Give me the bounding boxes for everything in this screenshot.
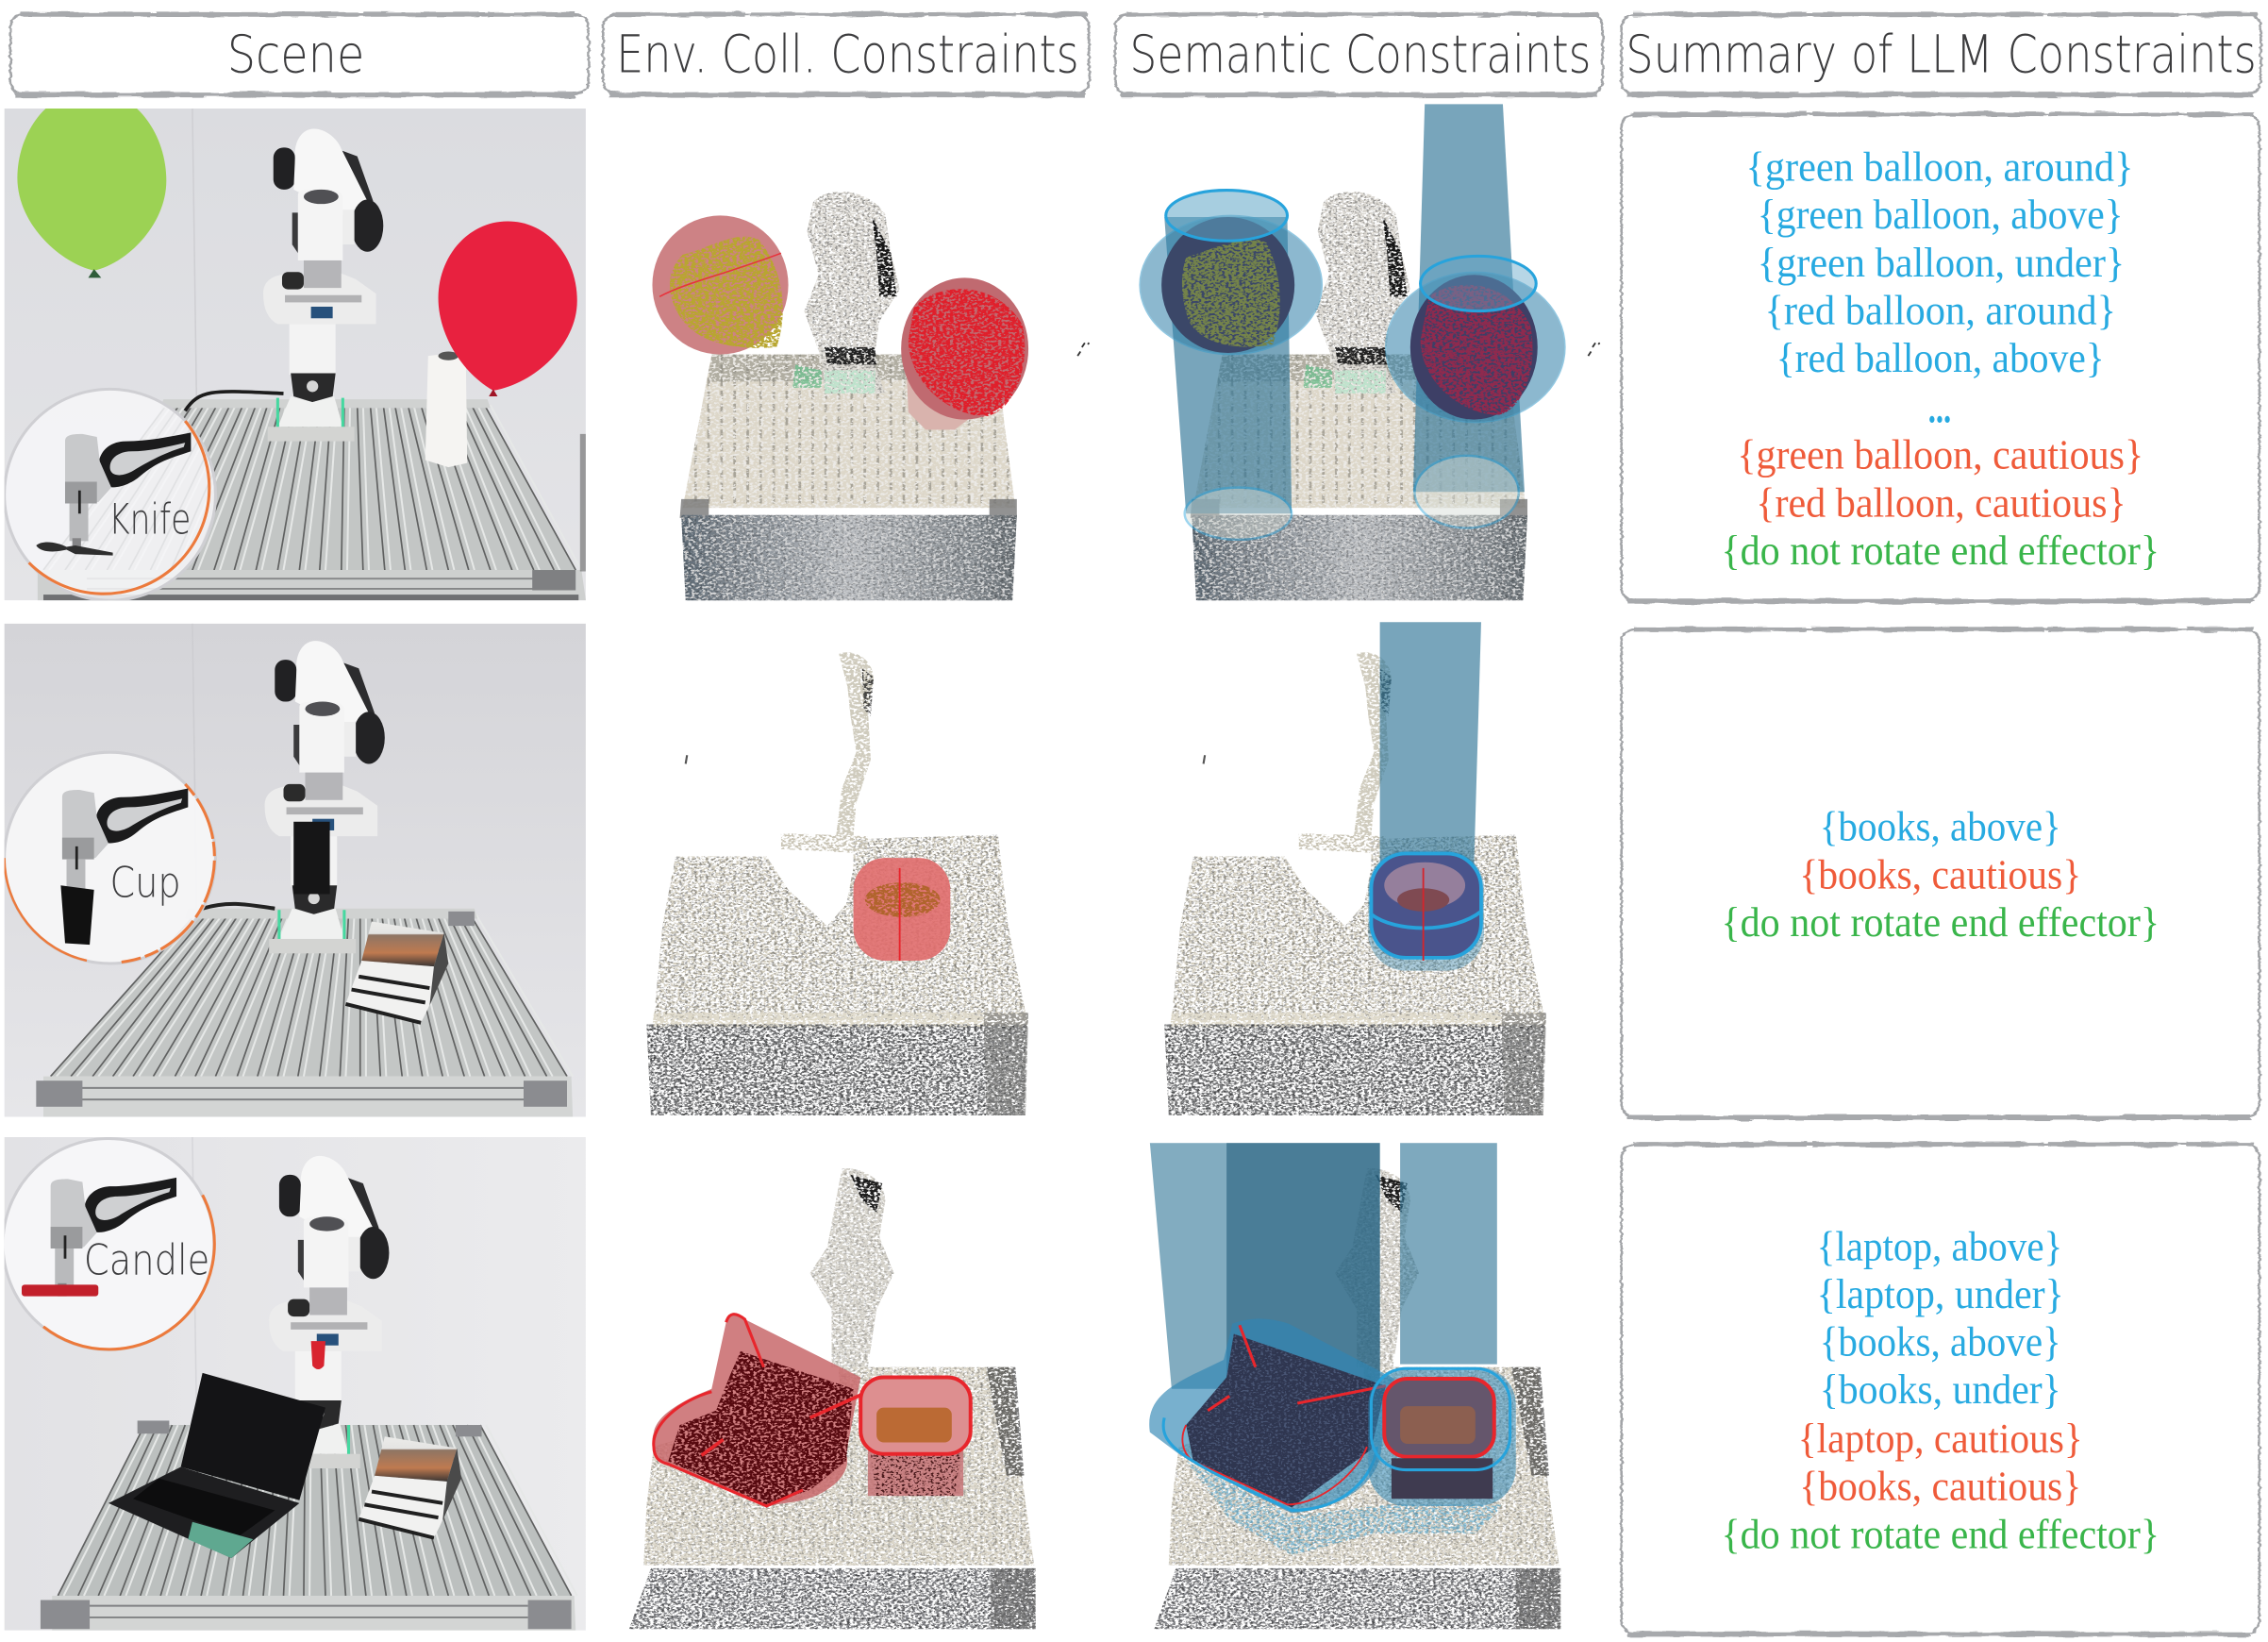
sphere: red balloon [1386,256,1565,423]
sphere: green balloon [1140,191,1322,355]
panel: summary row 2: {books, above} [1820,803,2061,850]
label: Knife: Knife [108,496,191,545]
heading: Semantic Constraints: Semantic Constraints [1129,25,1591,86]
panel: summary row 1: {do not rotate end effector} [1721,527,2160,574]
panel: summary row 3: {books, under} [1820,1366,2061,1413]
icon: books [345,922,448,1023]
collision sphere: red balloon [901,277,1028,420]
collision box: books [854,858,950,961]
icon: robot arm [263,128,383,442]
heading: Scene: Scene [227,25,364,86]
panel: summary row 1: ... [1928,385,1951,432]
panel: summary row 1: {green balloon, around} [1746,143,2133,191]
inset: knife gripper [5,389,215,600]
panel: summary row 2: {do not rotate end effector} [1721,898,2160,946]
constraint volume: laptop [1149,1318,1394,1514]
heading: Env. Coll. Constraints [603,14,1089,94]
icon: candle [22,1284,98,1297]
icon: books [359,1436,461,1538]
collision volume: laptop [652,1315,868,1506]
heading: Scene [10,14,589,94]
constraint volume: books [1368,850,1484,971]
panel: env collision row 2 [646,652,1028,1115]
panel: summary row 1: {red balloon, around} [1764,286,2116,333]
panel: summary row 3: {books, above} [1820,1317,2061,1365]
constraint column: red balloon [1413,104,1525,528]
panel: summary row 2: {books, cautious} [1799,850,2081,897]
icon: held candle [311,1341,325,1369]
panel: summary row 3: {do not rotate end effector} [1721,1510,2160,1557]
panel: summary row 1 [1622,114,2260,601]
panel: scene photo, laptop and candle [3,1137,586,1631]
icon: paper towel [425,352,467,467]
icon: green balloon [17,90,166,277]
inset: cup gripper [5,752,215,963]
panel: summary row 3 [1622,1145,2260,1634]
panel: summary row 2 [1622,629,2260,1117]
icon: cable [185,392,283,410]
panel: scene photo, books and cup [5,624,586,1117]
panel: summary row 1: {green balloon, above} [1758,191,2124,238]
panel: semantic constraints row 1 [1140,104,1600,600]
heading: Semantic Constraints [1115,14,1603,94]
icon: robot arm [265,641,385,953]
icon: robot arm [269,1156,389,1468]
constraint volume: books [1368,1367,1516,1506]
icon: knife [36,543,113,556]
icon: laptop [108,1373,325,1558]
panel: summary row 1: {red balloon, cautious} [1756,478,2126,526]
panel: summary row 3: {laptop, under} [1817,1270,2064,1317]
inset: candle gripper [3,1139,214,1349]
constraint column: books [1400,1143,1497,1365]
panel: env collision row 3 [629,1168,1036,1629]
collision sphere: green balloon [652,215,789,355]
icon: cup [60,885,94,945]
icon: cable [203,904,275,909]
panel: summary row 1: {green balloon, under} [1758,239,2125,286]
paper towel trace [907,379,972,429]
panel: semantic constraints row 3 [1149,1143,1560,1629]
constraint column: green balloon [1164,217,1292,540]
panel: summary row 3: {laptop, above} [1817,1222,2062,1269]
label: Cup: Cup [110,859,181,907]
panel: summary row 3: {laptop, cautious} [1798,1415,2083,1462]
panel: env collision row 1 [652,192,1089,600]
panel: scene photo, balloons [5,90,586,600]
fuzzy blue margin [1186,1461,1504,1555]
icon: red balloon [439,222,577,396]
constraint columns: laptop [1150,1143,1380,1389]
panel: semantic constraints row 2 [1164,622,1546,1115]
panel: summary row 3: {books, cautious} [1799,1463,2081,1510]
panel: summary row 1: {red balloon, above} [1776,334,2105,381]
icon: table [38,399,586,600]
heading: Env. Coll. Constraints: Env. Coll. Constraints [616,25,1079,86]
panel: summary row 1: {green balloon, cautious} [1737,431,2143,478]
icon: table [36,909,573,1117]
icon: table [41,1420,577,1631]
collision volume: books [860,1377,971,1496]
constraint column: books [1380,622,1481,868]
label: Candle: Candle [84,1237,209,1285]
